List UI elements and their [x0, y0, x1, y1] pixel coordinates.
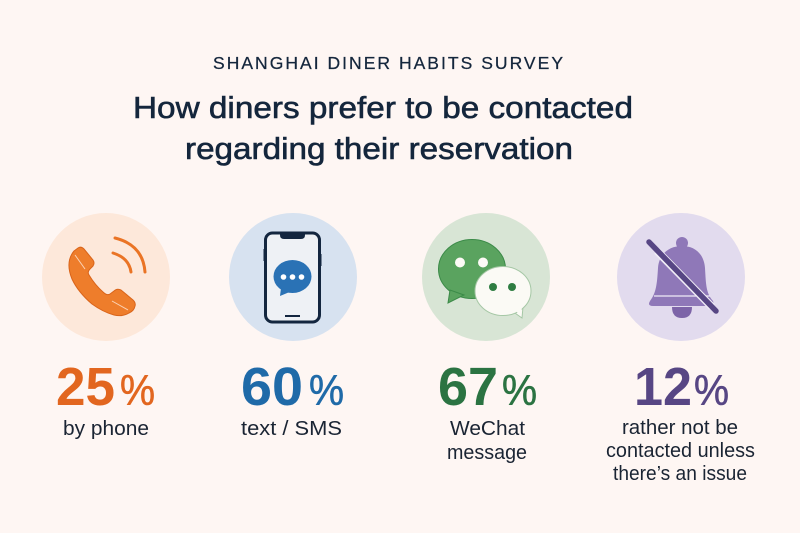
label: contacted unless [606, 440, 755, 462]
title: How diners prefer to be contacted [133, 90, 633, 125]
icon: phone [42, 213, 170, 341]
stat: 60%: 60 [241, 357, 303, 417]
label: by phone [63, 418, 149, 440]
stat: 67%: 67 [438, 357, 498, 417]
panel: text / SMS [229, 213, 357, 440]
icon: WeChat bubbles [422, 213, 550, 341]
label: rather not be [622, 417, 738, 439]
percent sign: % [694, 367, 729, 415]
percent sign: % [120, 367, 155, 415]
panel: rather not be contacted [606, 213, 755, 485]
percent sign: % [309, 367, 344, 415]
percent sign: % [502, 367, 537, 415]
label: WeChat [450, 418, 525, 440]
stat: 25%: 25 [56, 357, 115, 417]
title [133, 90, 633, 166]
panel: by phone [42, 213, 170, 440]
label [447, 418, 527, 464]
icon: smartphone with chat bubble [229, 213, 357, 341]
label: text / SMS [241, 418, 342, 440]
panel: WeChat message [422, 213, 550, 464]
label: there’s an issue [613, 463, 747, 485]
eyebrow heading: SHANGHAI DINER HABITS SURVEY [213, 53, 563, 73]
label [606, 417, 755, 485]
title: regarding their reservation [185, 131, 573, 166]
stat: 12%: 12 [634, 357, 692, 417]
icon: muted bell [617, 213, 745, 341]
label: message [447, 442, 527, 464]
